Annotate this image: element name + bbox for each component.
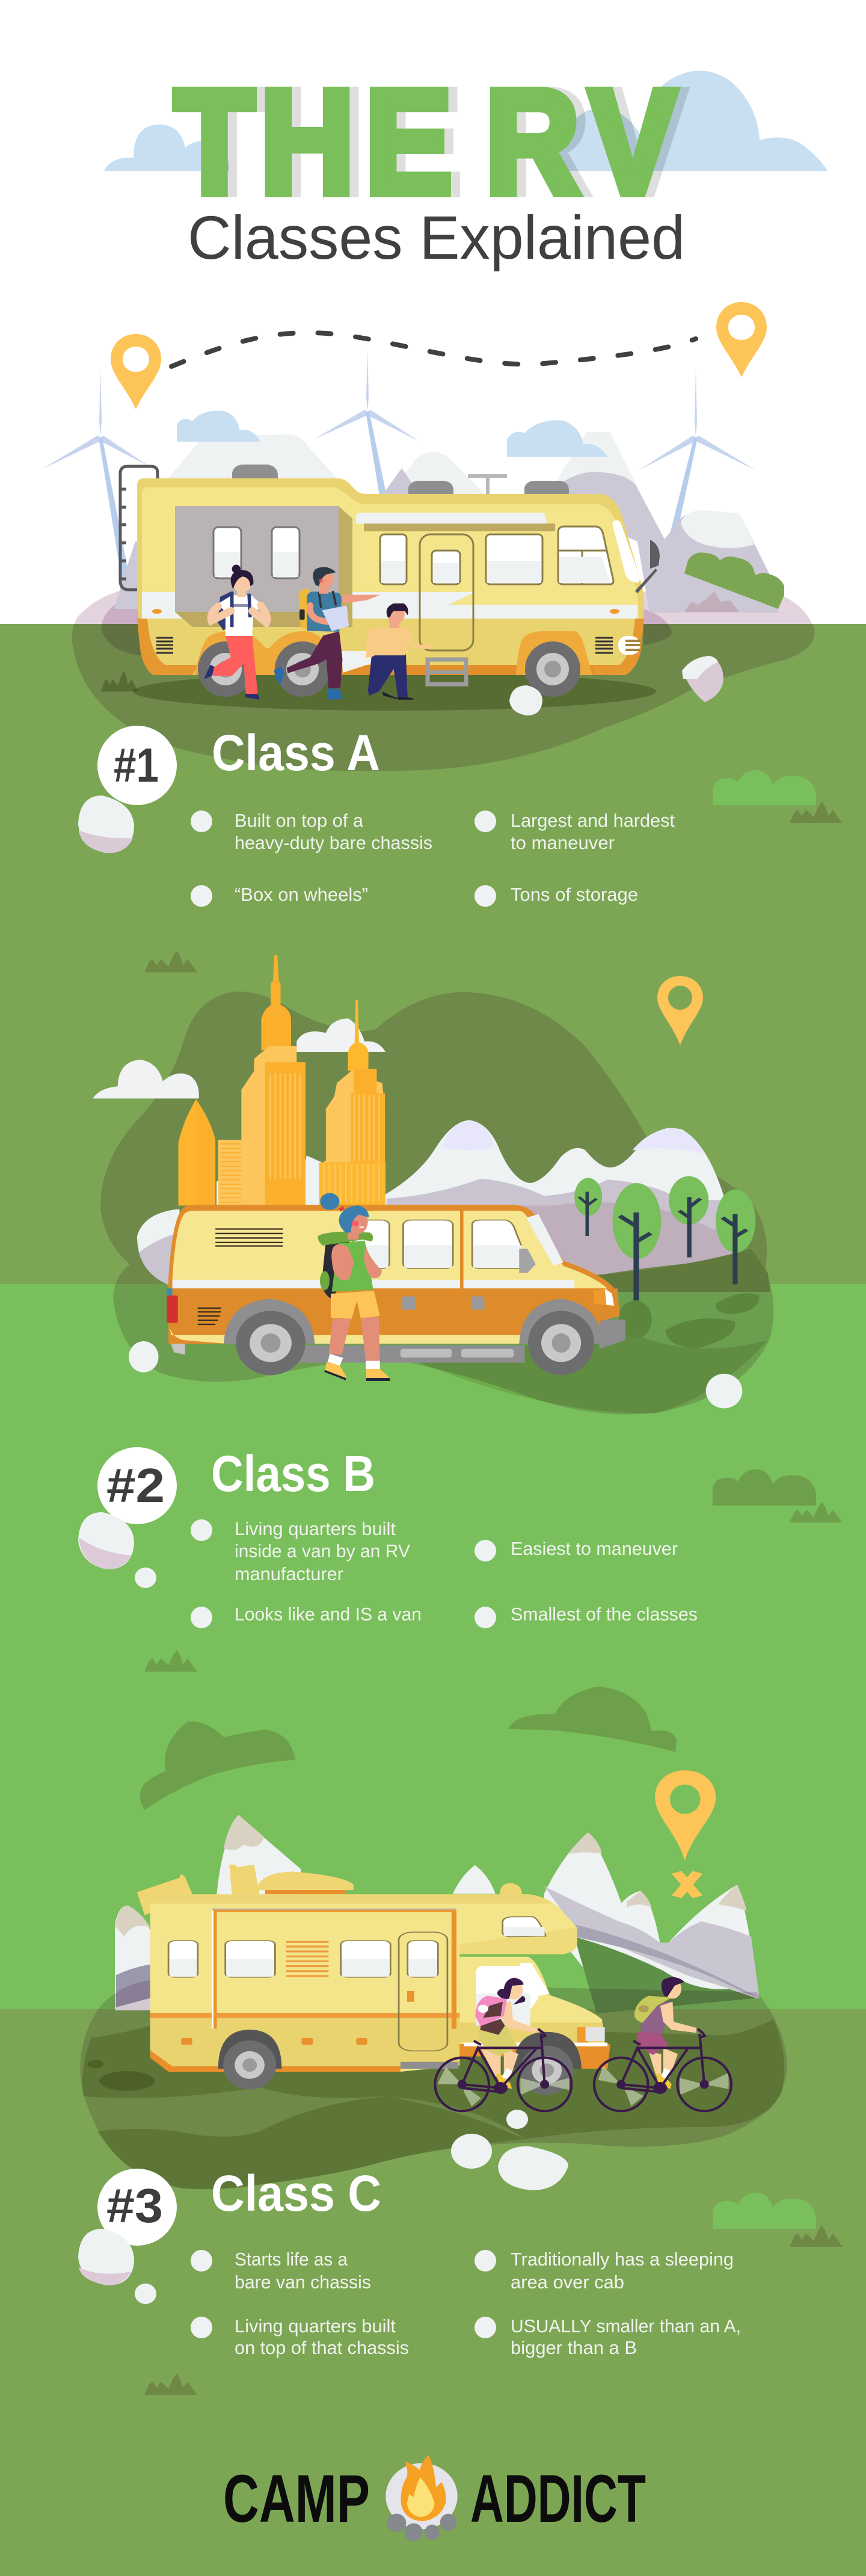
bullet: sleeping area: Traditionally has a sleeping bbox=[511, 2249, 734, 2270]
mountains bbox=[114, 432, 779, 613]
grass left bbox=[144, 951, 197, 972]
small stone bbox=[135, 2284, 156, 2304]
stones bbox=[129, 1341, 742, 1408]
rear wheel bbox=[218, 2030, 281, 2069]
windshield bbox=[526, 1214, 564, 1266]
badge #1: #1 bbox=[114, 738, 159, 792]
awning rail bbox=[213, 1910, 456, 2029]
bullet: usually smaller: USUALLY smaller than an A, bbox=[511, 2315, 741, 2337]
badge #1 bbox=[97, 726, 177, 805]
bush right bbox=[713, 2193, 816, 2229]
wordmark: CAMP: CAMP bbox=[223, 2461, 370, 2536]
scene: Class C bbox=[80, 1687, 787, 2189]
windows and door bbox=[380, 527, 613, 650]
ladder bbox=[120, 466, 158, 590]
roof cargo bbox=[137, 1865, 522, 1915]
van windows bbox=[354, 1220, 530, 1268]
stone under badge bbox=[78, 2229, 134, 2285]
upper body panel bbox=[142, 487, 639, 619]
icon: left pin bbox=[111, 334, 161, 409]
small stone bbox=[135, 1568, 156, 1588]
bullet: sleeping area: area over cab bbox=[511, 2272, 624, 2293]
cloud left bbox=[93, 1060, 199, 1099]
bullet: usually smaller: bigger than a B bbox=[511, 2337, 637, 2358]
bike: man bbox=[594, 2029, 731, 2111]
cloud: title right bbox=[552, 71, 828, 171]
cloud left bbox=[140, 1722, 295, 1810]
vehicle: Class C motorhome bbox=[137, 1865, 610, 2095]
blob behind van bbox=[100, 992, 773, 1415]
bullet: living quarters: Living quarters built bbox=[235, 2315, 396, 2337]
RV shadow bbox=[133, 672, 656, 711]
bullet: chassis: Built on top of a bbox=[235, 810, 364, 831]
icon: right pin bbox=[716, 302, 767, 377]
grass right bbox=[790, 1502, 843, 1522]
bullet: easiest: Easiest to maneuver bbox=[511, 1538, 678, 1559]
bike: woman bbox=[435, 2029, 571, 2111]
bullet: box on wheels: “Box on wheels” bbox=[235, 884, 368, 905]
person: man with map bbox=[274, 567, 380, 700]
blob inner wave bbox=[82, 2019, 784, 2139]
bullet: box on wheels bbox=[191, 884, 368, 907]
grass right bbox=[790, 2225, 843, 2247]
title: THE RV: THE RV bbox=[174, 60, 676, 224]
side vent bbox=[286, 1942, 328, 1976]
title shadow: THE RV bbox=[183, 60, 685, 224]
grass left bbox=[144, 2373, 197, 2395]
clouds behind RV bbox=[177, 411, 607, 457]
bullet: chassis bbox=[191, 810, 432, 853]
windshield bbox=[612, 520, 640, 582]
title block bbox=[104, 60, 828, 272]
windmills bbox=[41, 348, 755, 590]
cloud right bbox=[508, 1687, 677, 1752]
icon: pin Class B bbox=[657, 976, 703, 1045]
bullet: living quarters: Living quarters built bbox=[235, 1518, 396, 1539]
bullet: storage: Tons of storage bbox=[511, 884, 638, 905]
vehicle: Class A motorhome bbox=[120, 465, 660, 697]
puddles bbox=[87, 2060, 155, 2091]
stone: front bbox=[509, 685, 542, 715]
cyclist: man bbox=[634, 1977, 696, 2089]
bullet: starts life: Starts life as a bbox=[235, 2249, 348, 2270]
blob behind class A bbox=[72, 587, 815, 771]
badge #3 bbox=[97, 2169, 177, 2246]
windows bbox=[168, 1917, 545, 2051]
stones below cyclists bbox=[451, 2110, 568, 2190]
grilles bbox=[156, 638, 613, 653]
slide-out bbox=[175, 506, 352, 627]
headlight bbox=[594, 1288, 613, 1306]
cyclists bbox=[435, 1977, 731, 2111]
icon: pin bbox=[655, 1770, 716, 1861]
mirror bbox=[519, 1249, 536, 1273]
person: woman with backpack bbox=[204, 564, 267, 700]
scene: Class A bbox=[41, 348, 815, 771]
bullet: chassis: heavy-duty bare chassis bbox=[235, 832, 432, 853]
skyscrapers bbox=[179, 955, 385, 1205]
heading: Class A: Class A bbox=[212, 724, 380, 781]
grass left bbox=[144, 1650, 197, 1672]
section: Class C text bbox=[78, 2165, 843, 2395]
mirror bbox=[635, 540, 660, 593]
icon: cross bbox=[677, 1873, 698, 1897]
cloud: title left bbox=[104, 125, 229, 171]
subtitle: Classes Explained bbox=[188, 203, 685, 272]
bush on mountain bbox=[684, 552, 784, 609]
markers bbox=[181, 1991, 414, 2045]
bullet: usually smaller bbox=[474, 2315, 741, 2358]
badge #2: #2 bbox=[106, 1459, 165, 1512]
bike wheel wedges bbox=[438, 2066, 728, 2107]
stone under badge bbox=[78, 795, 134, 853]
stone behind van bbox=[137, 1209, 179, 1285]
body bbox=[137, 478, 644, 675]
blob bottom wave bbox=[97, 2096, 524, 2189]
scene: Class B bbox=[93, 955, 773, 1415]
blob under RV C bbox=[80, 1980, 787, 2189]
cyclist: woman bbox=[475, 1978, 537, 2089]
bush right bbox=[713, 770, 816, 805]
bullet: living quarters: on top of that chassis bbox=[235, 2337, 409, 2358]
living box bbox=[150, 1894, 577, 2072]
bullet: starts life: bare van chassis bbox=[235, 2272, 371, 2293]
icon: campfire bbox=[385, 2455, 458, 2541]
badge #2 bbox=[97, 1447, 177, 1524]
stone under badge bbox=[78, 1512, 134, 1569]
grass right bbox=[790, 802, 843, 823]
bullet: living quarters bbox=[191, 2315, 409, 2358]
roof vents and antenna bbox=[232, 465, 569, 494]
bullet: sleeping area bbox=[474, 2249, 734, 2293]
heading: Class B: Class B bbox=[211, 1445, 375, 1502]
person: hiker woman bbox=[318, 1193, 390, 1381]
person: boy bbox=[366, 604, 432, 700]
section: Class A text bbox=[78, 724, 843, 972]
bullet: looks like: Looks like and IS a van bbox=[235, 1604, 422, 1625]
dashed route bbox=[171, 333, 696, 366]
bullet: largest: to maneuver bbox=[511, 832, 615, 853]
wheels bbox=[198, 641, 580, 697]
wheel arches bbox=[224, 1299, 315, 1344]
bullet: largest bbox=[474, 810, 675, 853]
bullet: smallest: Smallest of the classes bbox=[511, 1604, 698, 1625]
window lower tints bbox=[381, 557, 610, 583]
handles bbox=[402, 1296, 416, 1310]
bush right bbox=[713, 1469, 816, 1506]
markers bbox=[152, 609, 162, 614]
mountains bbox=[115, 1815, 760, 2013]
bullet: largest: Largest and hardest bbox=[511, 810, 675, 831]
bullet: living quarters: manufacturer bbox=[235, 1563, 343, 1584]
wordmark: ADDICT: ADDICT bbox=[470, 2461, 646, 2536]
awning bbox=[356, 513, 555, 531]
bullet: living quarters bbox=[191, 1518, 410, 1584]
vents bbox=[215, 1229, 283, 1246]
wheels bbox=[236, 1311, 306, 1375]
trees bbox=[574, 1176, 755, 1300]
lower trim bbox=[137, 619, 644, 675]
bullet: looks like bbox=[191, 1604, 422, 1628]
heading: Class C: Class C bbox=[211, 2165, 381, 2222]
hill shading bbox=[420, 1293, 768, 1413]
section: Class B text bbox=[78, 1445, 843, 1672]
front wheel bbox=[514, 2032, 582, 2069]
mountains bbox=[216, 1120, 770, 1292]
step bbox=[428, 659, 466, 684]
vehicle: Class B van bbox=[167, 1205, 625, 1375]
grass tuft in blob bbox=[101, 671, 138, 691]
headlight bbox=[618, 636, 640, 655]
bullet: starts life bbox=[191, 2249, 371, 2293]
logo: Camp Addict bbox=[223, 2455, 646, 2541]
stone: right bbox=[682, 656, 723, 702]
cloud right bbox=[296, 1018, 385, 1052]
cab bbox=[459, 1957, 605, 2044]
inner blobs bbox=[101, 593, 672, 656]
bullet: living quarters: inside a van by an RV bbox=[235, 1540, 410, 1561]
badge #3: #3 bbox=[106, 2179, 163, 2232]
white stripe bbox=[142, 592, 637, 619]
